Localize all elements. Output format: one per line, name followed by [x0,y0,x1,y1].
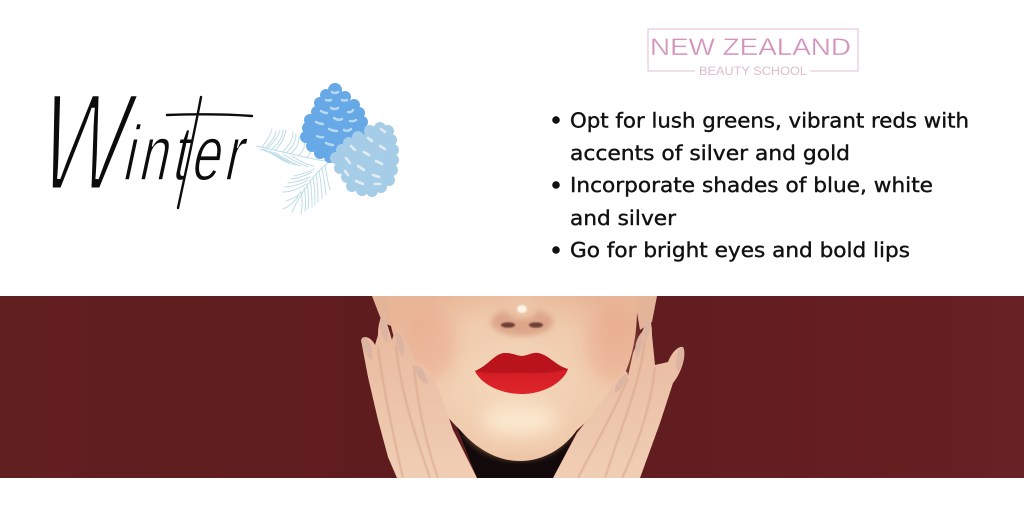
logo: New Zealand Beauty School: NEW ZEALAND [650,34,851,61]
logo: New Zealand Beauty School [648,29,858,78]
side of the head [372,296,657,330]
bullet list [552,108,969,262]
bullet 1 [552,108,969,165]
dark blue cone [300,83,368,163]
bullet 1: Opt for lush greens, vibrant reds with [570,108,969,132]
branch needles lower [283,162,330,214]
face [388,290,637,461]
photo band: woman with red lips [0,290,1024,478]
bullet 1: accents of silver and gold [570,141,850,165]
bullet 2: Incorporate shades of blue, white [570,173,933,197]
bullet 2: and silver [570,206,677,230]
lips [475,353,568,394]
icon: pine cones with branches [256,83,399,214]
title: Winter: W [25,63,146,220]
logo: New Zealand Beauty School: BEAUTY SCHOOL [699,66,808,78]
bullet 3: Go for bright eyes and bold lips [570,238,910,262]
black neck [456,425,580,478]
bullet 2 [552,173,933,230]
left hand [361,318,477,478]
light blue cone [330,122,399,197]
maroon background [0,296,1024,478]
title: Winter [25,63,269,220]
branch needles upper [256,129,325,167]
right hand [553,318,684,478]
title: Winter: inter [117,110,259,197]
nose [491,297,553,336]
